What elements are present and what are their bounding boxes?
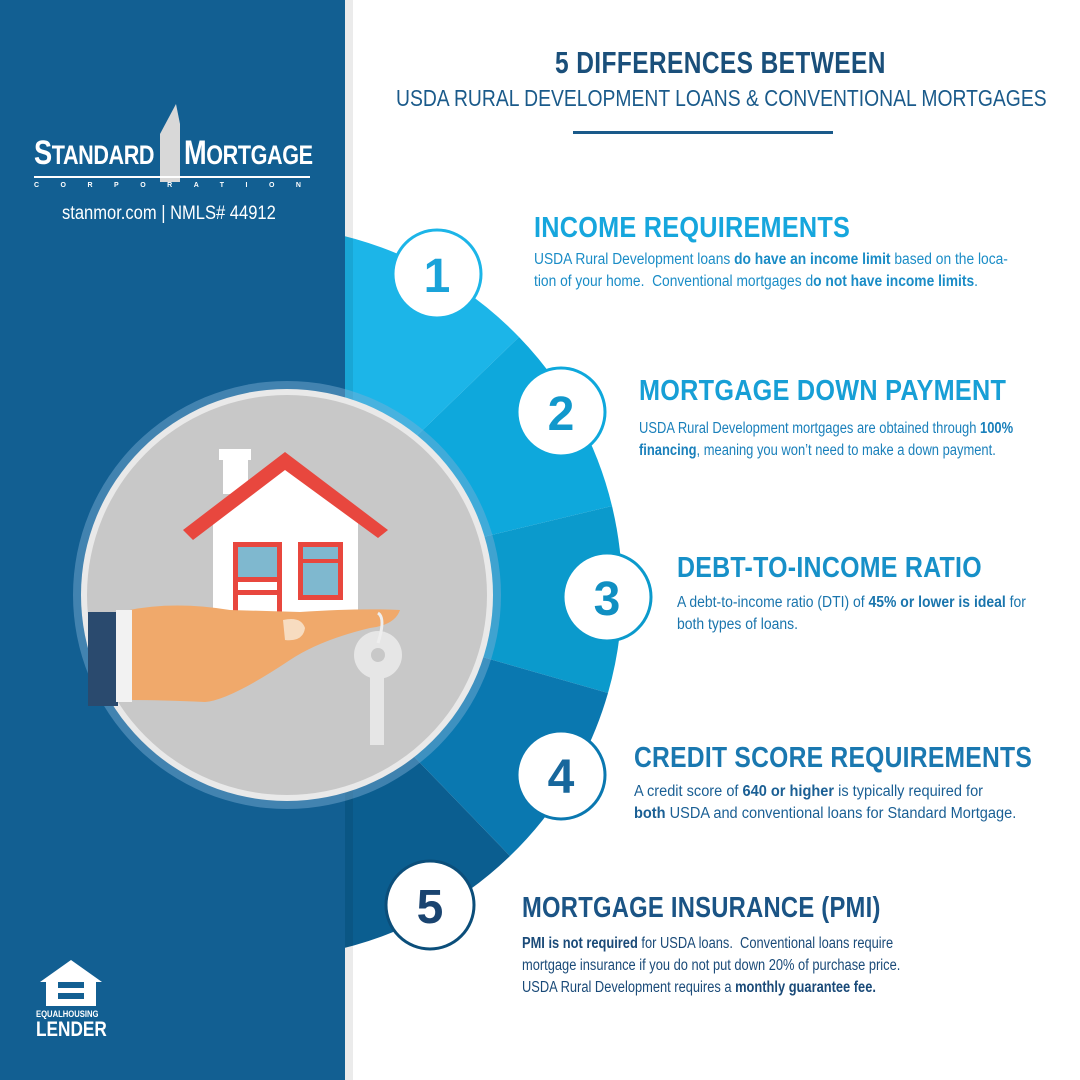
item 3: DEBT-TO-INCOME RATIO [677,552,982,584]
item 5 [522,892,900,996]
icon: tower [160,104,180,182]
item 1: INCOME REQUIREMENTS [534,212,850,244]
icon: number 5: 5 [417,881,443,934]
title: USDA RURAL DEVELOPMENT LOANS & CONVENTIONAL MORTGAGES [396,85,1047,111]
item 1: USDA Rural Development loans do have an income limit based on the loca- [534,251,1008,268]
logo: MORTGAGE [184,134,313,172]
equal housing lender logo: LENDER [36,1018,107,1041]
item 1: tion of your home. Conventional mortgages do not have income limits. [534,273,978,290]
item 2 [639,375,1013,459]
icon: number 4: 4 [548,751,575,804]
item 5: USDA Rural Development requires a monthly guarantee fee. [522,979,876,996]
item 4: A credit score of 640 or higher is typically required for [634,783,983,800]
item 5: mortgage insurance if you do not put down 20% of purchase price. [522,957,900,974]
icon: number 3: 3 [594,573,620,626]
logo: STANDARD [34,134,154,172]
item 2: financing, meaning you won’t need to make a down payment. [639,442,996,459]
icon: number 2: 2 [548,388,574,441]
item 5: MORTGAGE INSURANCE (PMI) [522,892,881,924]
logo: CORPORATION [34,182,322,189]
website text: stanmor.com | NMLS# 44912 [62,203,276,224]
item 3 [677,552,1026,633]
icon: number 3 [563,553,651,641]
illustration: house in hand [73,381,501,809]
item 2: MORTGAGE DOWN PAYMENT [639,375,1006,407]
item 3: A debt-to-income ratio (DTI) of 45% or lower is ideal for [677,594,1026,611]
fan segments [255,225,622,959]
icon: number 1 [393,230,481,318]
item 4: both USDA and conventional loans for Standard Mortgage. [634,805,1016,822]
icon: number 4 [517,731,605,819]
item 2: USDA Rural Development mortgages are obtained through 100% [639,420,1013,437]
item 5: PMI is not required for USDA loans. Conventional loans require [522,935,893,952]
icon: number 2 [517,368,605,456]
item 1 [534,212,1008,290]
left panel [0,0,345,1080]
item 3: both types of loans. [677,616,798,633]
equal housing lender logo: EQUALHOUSING [36,1009,98,1019]
title: 5 DIFFERENCES BETWEEN [555,45,886,80]
logo [34,104,322,189]
item 4 [634,742,1032,822]
equal housing lender logo [36,960,107,1041]
icon: number 5 [386,861,474,949]
title [396,45,1047,134]
item 4: CREDIT SCORE REQUIREMENTS [634,742,1032,774]
icon: number 1: 1 [424,250,450,303]
